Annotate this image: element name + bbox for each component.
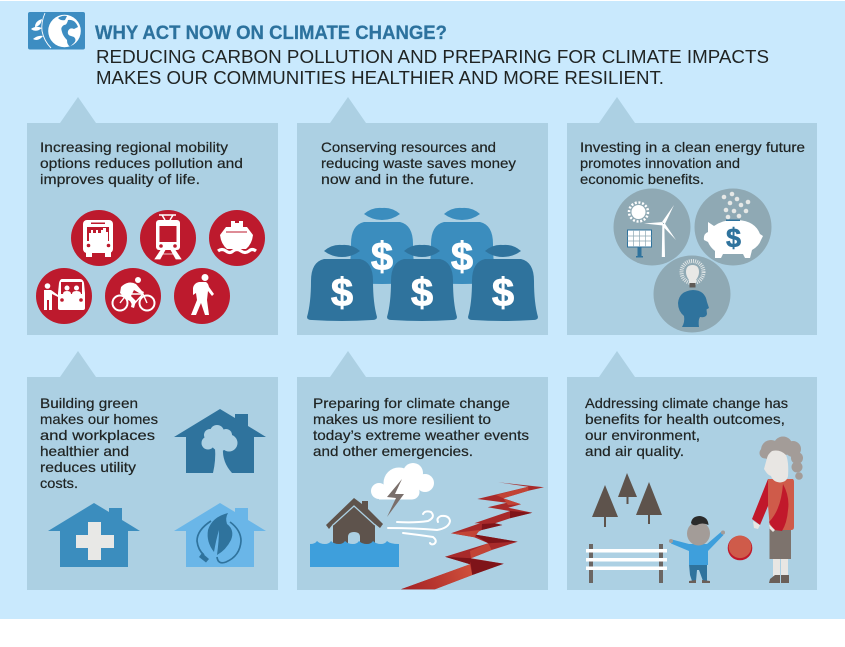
icon: front money bag right: $ (492, 271, 514, 315)
icon: front money bag centre: $ (411, 271, 433, 315)
text: health benefits: our environment, (585, 427, 700, 443)
text: regional mobility: improves quality of life. (40, 171, 200, 187)
text: regional mobility: options reduces pollution and (40, 155, 243, 171)
text: building green: and workplaces (40, 427, 155, 443)
icon: front money bag centre (387, 245, 457, 321)
text: health benefits: and air quality. (585, 443, 684, 459)
text: regional mobility (40, 139, 243, 187)
icon: wind gusts (388, 511, 450, 544)
text: conserving resources: now and in the future. (321, 171, 474, 187)
text: clean energy: economic benefits. (580, 171, 704, 187)
text: building green (40, 395, 158, 491)
icon: storm cloud with lightning (371, 463, 434, 517)
text: climate resilience (313, 395, 529, 459)
text: climate resilience: Preparing for climate change (313, 395, 510, 411)
icon: light rail (140, 210, 196, 266)
text: health benefits (585, 395, 788, 459)
text: regional mobility: Increasing regional mobility (40, 139, 228, 155)
icon: red ball (728, 536, 752, 560)
text: building green: reduces utility (40, 459, 136, 475)
panel: building green (27, 351, 278, 590)
title: WHY ACT NOW ON CLIMATE CHANGE? (95, 22, 447, 44)
icon: back money bag right: $ (451, 235, 473, 279)
text: clean energy: Investing in a clean energy future (580, 139, 805, 155)
icon: back money bag left: $ (371, 235, 393, 279)
text: conserving resources: Conserving resources and (321, 139, 496, 155)
text: building green: healthier and (40, 443, 129, 459)
icon: back money bag right (427, 208, 497, 284)
panel: regional mobility (27, 97, 278, 335)
text: conserving resources: reducing waste saves money (321, 155, 516, 171)
icon: trees (592, 473, 662, 527)
icon: woman (752, 436, 803, 583)
icon: house with leaf and plug (174, 503, 266, 567)
icon: house with medical cross (48, 503, 140, 567)
subtitle: REDUCING CARBON POLLUTION AND PREPARING FOR CLIMATE IMPACTS (96, 46, 769, 67)
subtitle: MAKES OUR COMMUNITIES HEALTHIER AND MORE RESILIENT. (96, 67, 664, 88)
text: building green: costs. (40, 475, 78, 491)
icon: bus (71, 210, 127, 266)
icon: head with light bulb (654, 256, 730, 332)
subtitle (96, 46, 769, 88)
panel: health benefits (567, 351, 817, 590)
text: clean energy (580, 139, 805, 187)
text: building green: Building green (40, 395, 138, 411)
text: health benefits: Addressing climate change has (585, 395, 788, 411)
text: conserving resources (321, 139, 516, 187)
icon: ground crack (401, 482, 544, 589)
text: building green: makes our homes (40, 411, 158, 427)
icon: house with tree (174, 409, 266, 473)
panel: clean energy (567, 97, 817, 335)
icon: park bench (586, 544, 667, 583)
icon: piggy bank and coins: $ (726, 223, 741, 253)
icon: cyclist (105, 268, 161, 324)
icon: front money bag left: $ (331, 271, 353, 315)
icon: solar and wind (614, 188, 690, 266)
text: health benefits: benefits for health outcomes, (585, 411, 785, 427)
icon: piggy bank and coins (694, 188, 772, 266)
icon: globe and leaves logo (28, 12, 85, 50)
text: climate resilience: and other emergencies. (313, 443, 473, 459)
icon: front money bag left (307, 245, 377, 321)
icon: pedestrian (174, 268, 230, 324)
icon: front money bag right (468, 245, 538, 321)
icon: carpool (36, 268, 92, 324)
panel: conserving resources (297, 97, 548, 335)
text: climate resilience: makes us more resilient to (313, 411, 491, 427)
icon: flooded house (310, 498, 399, 567)
text: climate resilience: today’s extreme weather events (313, 427, 529, 443)
text: clean energy: promotes innovation and (580, 155, 740, 171)
panel: climate resilience (297, 351, 548, 590)
icon: ferry (209, 210, 265, 266)
icon: back money bag left (347, 208, 417, 284)
icon: child (669, 516, 725, 583)
